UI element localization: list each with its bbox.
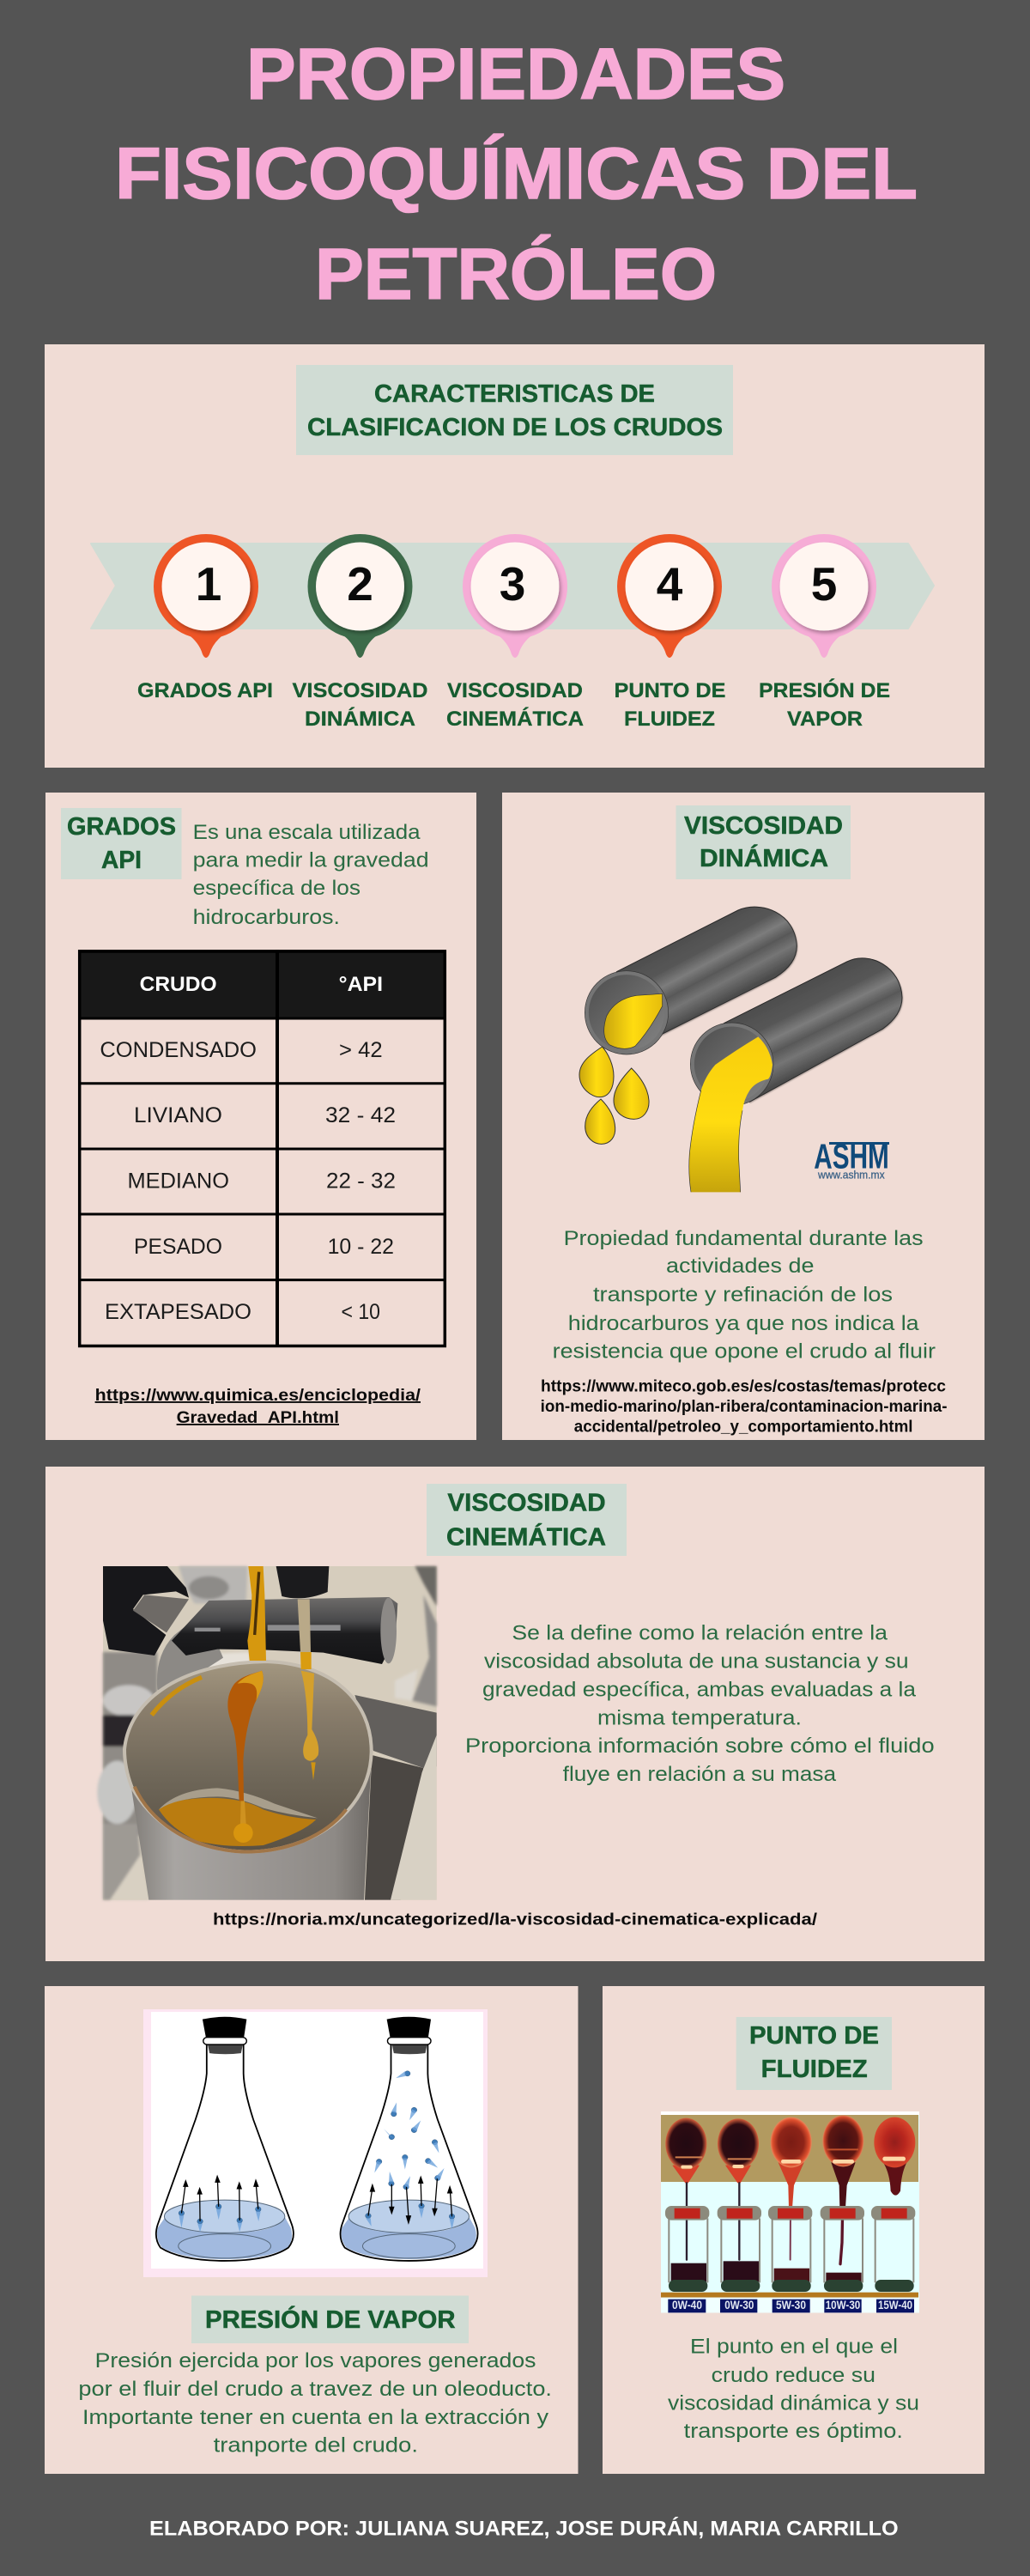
pin labels: GRADOS API <box>137 679 273 702</box>
description: viscosidad cinematica: gravedad específica, ambas evaluadas a la <box>482 1678 916 1702</box>
panel: viscosidad cinematica <box>45 1467 985 1961</box>
description: viscosidad dinamica <box>553 1227 936 1364</box>
pin labels <box>137 678 890 731</box>
pin 3 <box>463 534 567 658</box>
photo: oils pouring into beakers: 10W-30 <box>826 2298 860 2312</box>
description: viscosidad dinamica: transporte y refinación de los <box>593 1283 893 1307</box>
source link: miteco: accidental/petroleo_y_comportamiento.html <box>574 1419 913 1437</box>
description: viscosidad dinamica: actividades de <box>666 1255 814 1278</box>
description: presion de vapor <box>78 2349 552 2458</box>
illustration: flasks with vapor <box>143 2009 488 2277</box>
table: crudo vs api: LIVIANO <box>134 1103 222 1127</box>
heading: presion de vapor: PRESIÓN DE VAPOR <box>205 2305 456 2334</box>
pin 5 <box>772 534 876 658</box>
pin labels: FLUIDEZ <box>624 708 715 731</box>
pin 5: 5 <box>811 557 837 611</box>
heading: caracteristicas: CARACTERISTICAS DE <box>374 380 655 408</box>
heading: caracteristicas <box>296 365 733 455</box>
description: presion de vapor: tranporte del crudo. <box>214 2434 418 2458</box>
pin 2 <box>307 534 412 658</box>
description: viscosidad cinematica: fluye en relación a su masa <box>563 1763 836 1786</box>
table: crudo vs api: 22 - 32 <box>326 1170 396 1194</box>
description: viscosidad dinamica: Propiedad fundamental durante las <box>564 1227 924 1250</box>
description: viscosidad cinematica <box>465 1622 935 1786</box>
title: FISICOQUÍMICAS DEL <box>115 133 918 214</box>
description: punto de fluidez <box>668 2336 919 2443</box>
heading: punto de fluidez: FLUIDEZ <box>761 2056 868 2083</box>
title <box>115 33 918 314</box>
table: crudo vs api: > 42 <box>339 1038 383 1062</box>
heading: viscosidad dinamica <box>676 805 851 879</box>
table: crudo vs api: MEDIANO <box>127 1170 229 1194</box>
panel: caracteristicas de clasificacion <box>45 344 985 768</box>
heading: grados api <box>61 808 182 879</box>
table: crudo vs api: 10 - 22 <box>328 1235 394 1259</box>
panel: viscosidad dinamica <box>502 793 985 1440</box>
heading: punto de fluidez <box>736 2017 892 2090</box>
table: crudo vs api: PESADO <box>134 1235 222 1259</box>
description: presion de vapor: por el fluir del crudo a travez de un oleoducto. <box>78 2378 552 2401</box>
pin 4 <box>617 534 722 658</box>
photo: oils pouring into beakers: 15W-40 <box>878 2298 912 2312</box>
pin labels: VISCOSIDAD <box>292 679 427 702</box>
heading: viscosidad cinematica <box>427 1484 627 1556</box>
table: crudo vs api: EXTAPESADO <box>105 1300 251 1324</box>
heading: viscosidad dinamica: VISCOSIDAD <box>684 812 843 840</box>
pin labels: CINEMÁTICA <box>446 707 584 731</box>
source link: miteco <box>541 1377 948 1437</box>
panel: punto de fluidez <box>603 1986 985 2474</box>
title: PROPIEDADES <box>246 33 785 114</box>
description: punto de fluidez: crudo reduce su <box>712 2364 876 2387</box>
description: viscosidad dinamica: hidrocarburos ya que nos indica la <box>568 1312 919 1335</box>
table: crudo vs api: < 10 <box>342 1300 380 1324</box>
panel: grados api <box>45 793 476 1440</box>
source link: quimica: https://www.quimica.es/enciclopedia/ <box>95 1387 421 1405</box>
photo: oils pouring into beakers: 5W-30 <box>776 2298 806 2312</box>
pin 1 <box>154 534 258 658</box>
description: viscosidad cinematica: misma temperatura. <box>597 1707 802 1729</box>
description: grados api: Es una escala utilizada <box>193 821 421 844</box>
logo: ashm: ASHM <box>814 1137 889 1176</box>
photo: oils pouring into beakers <box>661 2111 919 2312</box>
heading: viscosidad cinematica: CINEMÁTICA <box>446 1522 606 1551</box>
photo: oil dripping in viscometer tube <box>97 1566 437 1900</box>
description: presion de vapor: Importante tener en cuenta en la extracción y <box>82 2406 549 2429</box>
footer credits: ELABORADO POR: JULIANA SUAREZ, JOSE DURÁN, MARIA CARRILLO <box>149 2517 899 2541</box>
description: viscosidad dinamica: resistencia que opone el crudo al fluir <box>553 1340 936 1364</box>
source link: miteco: ion-medio-marino/plan-ribera/contaminacion-marina- <box>541 1398 948 1416</box>
description: viscosidad cinematica: viscosidad absoluta de una sustancia y su <box>484 1650 909 1674</box>
description: punto de fluidez: viscosidad dinámica y su <box>668 2392 919 2415</box>
description: punto de fluidez: transporte es óptimo. <box>684 2420 903 2443</box>
heading: presion de vapor <box>191 2296 469 2343</box>
description: grados api <box>193 821 429 929</box>
pin 1: 1 <box>196 557 221 611</box>
pin labels: DINÁMICA <box>305 707 415 731</box>
heading: viscosidad dinamica: DINÁMICA <box>700 843 828 872</box>
pin labels: PRESIÓN DE <box>759 678 890 702</box>
pin 3: 3 <box>500 557 525 611</box>
table: crudo vs api: CONDENSADO <box>100 1038 257 1062</box>
pin 4: 4 <box>657 557 683 611</box>
description: punto de fluidez: El punto en el que el <box>690 2336 898 2359</box>
pin labels: PUNTO DE <box>615 679 726 702</box>
logo: ashm: www.ashm.mx <box>817 1170 885 1182</box>
heading: caracteristicas: CLASIFICACION DE LOS CRUDOS <box>307 414 723 441</box>
photo: oils pouring into beakers: 0W-30 <box>724 2298 754 2312</box>
pin labels: VISCOSIDAD <box>447 679 583 702</box>
table: crudo vs api: CRUDO <box>140 973 217 996</box>
description: grados api: hidrocarburos. <box>193 906 340 929</box>
pin labels: VAPOR <box>787 708 863 731</box>
table: crudo vs api: 32 - 42 <box>325 1103 396 1127</box>
heading: grados api: API <box>101 847 142 874</box>
source link: miteco: https://www.miteco.gob.es/es/costas/temas/protecc <box>541 1377 946 1396</box>
arrow band <box>91 544 934 629</box>
photo: oils pouring into beakers: 0W-40 <box>672 2298 702 2312</box>
pin 2: 2 <box>347 557 373 611</box>
description: grados api: para medir la gravedad <box>193 848 429 872</box>
source link: quimica: Gravedad_API.html <box>177 1409 339 1427</box>
logo: ashm <box>814 1137 889 1182</box>
title: PETRÓLEO <box>315 234 717 314</box>
panel: presion de vapor <box>45 1986 579 2474</box>
source link: noria: https://noria.mx/uncategorized/la-viscosidad-cinematica-explicada/ <box>213 1911 818 1929</box>
heading: punto de fluidez: PUNTO DE <box>749 2022 879 2050</box>
description: presion de vapor: Presión ejercida por los vapores generados <box>95 2349 536 2372</box>
description: grados api: específica de los <box>193 877 360 900</box>
description: viscosidad cinematica: Se la define como la relación entre la <box>512 1622 888 1645</box>
heading: grados api: GRADOS <box>67 813 176 841</box>
description: viscosidad cinematica: Proporciona información sobre cómo el fluido <box>465 1735 935 1758</box>
table: crudo vs api: °API <box>339 973 383 996</box>
illustration: pipes with oil <box>579 907 902 1192</box>
source link: quimica <box>95 1387 421 1427</box>
table: crudo vs api <box>78 950 446 1347</box>
heading: viscosidad cinematica: VISCOSIDAD <box>447 1490 606 1517</box>
